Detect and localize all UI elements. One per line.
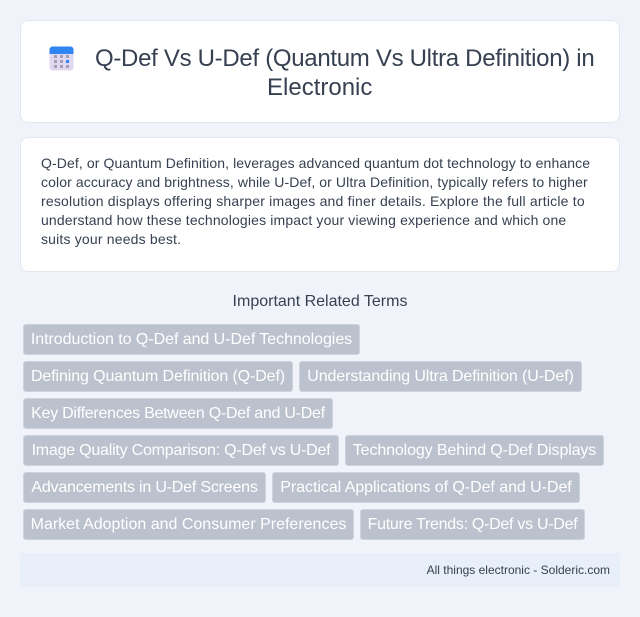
tag: Advancements in U-Def Screens [31, 479, 258, 496]
heading: important related terms: Important Related Terms [233, 293, 407, 310]
panel: title card [20, 20, 620, 123]
tag [23, 472, 266, 503]
heading: title: Q-Def Vs U-Def (Quantum Vs Ultra Definition) in [95, 45, 594, 72]
footer text: All things electronic - Solderic.com [427, 563, 610, 577]
tag: Introduction to Q-Def and U-Def Technologies [31, 331, 352, 348]
text block: summary [41, 155, 590, 247]
text block: summary: Q-Def, or Quantum Definition, leverages advanced quantum dot technology to enhance [41, 155, 590, 171]
heading: title [95, 45, 594, 101]
tag [23, 509, 354, 540]
text block: summary: understand how these technologies impact your viewing experience and which one [41, 212, 566, 228]
text block: summary: resolution displays offering sharper images and finer details. Explore the full article to [41, 193, 585, 209]
heading: title: Electronic [267, 74, 372, 101]
tag [23, 361, 293, 392]
tag: Practical Applications of Q-Def and U-Def [280, 479, 572, 496]
tag [272, 472, 580, 503]
tag [360, 509, 585, 540]
tag [23, 435, 339, 466]
tag: Technology Behind Q-Def Displays [353, 442, 596, 459]
tag [23, 324, 360, 355]
tag [299, 361, 582, 392]
text block: summary: color accuracy and brightness, while U-Def, or Ultra Definition, typically refers to higher [41, 174, 588, 190]
icon: calendar [50, 46, 74, 70]
tag: Market Adoption and Consumer Preferences [31, 516, 346, 533]
text block: summary: suits your needs best. [41, 231, 181, 247]
tag: Defining Quantum Definition (Q-Def) [31, 368, 285, 385]
panel: summary card [20, 137, 620, 272]
tag: Future Trends: Q-Def vs U-Def [368, 516, 577, 533]
tag list [23, 324, 604, 540]
footer [20, 553, 620, 587]
tag [23, 398, 333, 429]
tag: Understanding Ultra Definition (U-Def) [307, 368, 574, 385]
tag: Key Differences Between Q-Def and U-Def [31, 405, 325, 422]
tag [345, 435, 604, 466]
tag: Image Quality Comparison: Q-Def vs U-Def [32, 442, 330, 459]
